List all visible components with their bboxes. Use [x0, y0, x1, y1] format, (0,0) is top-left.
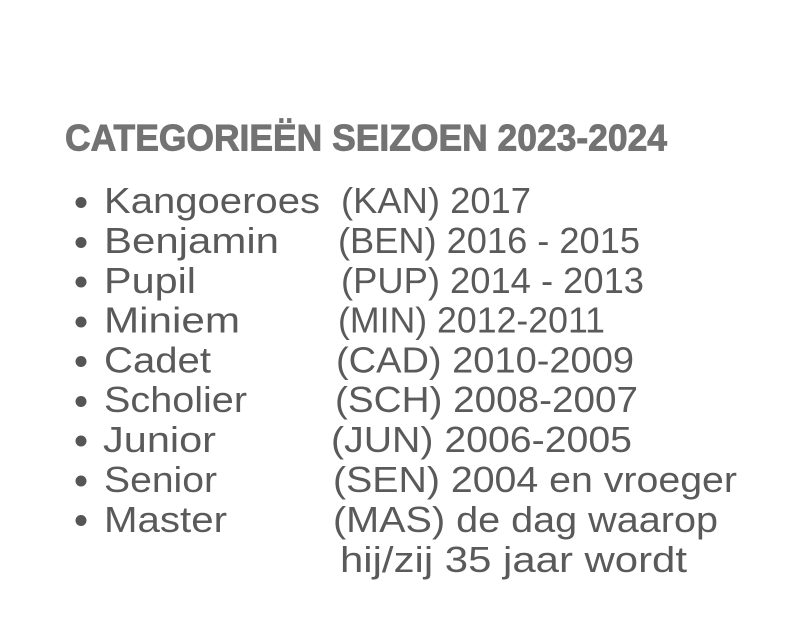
row: Master: hij/zij 35 jaar wordt — [340, 539, 687, 580]
row: Senior: Senior — [104, 459, 217, 500]
row: Miniem — [76, 300, 605, 340]
row: Junior — [76, 419, 632, 460]
row: Pupil: (PUP) 2014 - 2013 — [341, 260, 644, 301]
row: Pupil — [76, 260, 644, 301]
row: Miniem: Miniem — [104, 300, 240, 340]
row: Benjamin — [76, 220, 640, 261]
row: Senior: (SEN) 2004 en vroeger — [333, 459, 737, 500]
row: Senior — [76, 459, 737, 500]
row: Pupil: Pupil — [104, 260, 196, 301]
row: Kangoeroes — [76, 180, 531, 221]
row: Cadet: (CAD) 2010-2009 — [336, 340, 634, 380]
row: Scholier: (SCH) 2008-2007 — [335, 379, 638, 420]
title: CATEGORIEËN SEIZOEN 2023-2024 — [65, 118, 667, 158]
row: Master: (MAS) de dag waarop — [333, 499, 718, 540]
row: Cadet: Cadet — [104, 340, 211, 380]
row: Benjamin: (BEN) 2016 - 2015 — [338, 220, 640, 261]
row: Scholier: Scholier — [104, 379, 247, 420]
row: Master — [76, 499, 718, 580]
list of categories — [76, 180, 737, 580]
row: Benjamin: Benjamin — [104, 220, 279, 261]
row: Scholier — [76, 379, 638, 420]
row: Cadet — [76, 340, 634, 380]
row: Kangoeroes: (KAN) 2017 — [341, 180, 531, 221]
row: Miniem: (MIN) 2012-2011 — [338, 300, 605, 340]
row: Kangoeroes: Kangoeroes — [104, 180, 320, 221]
row: Junior: (JUN) 2006-2005 — [331, 419, 632, 460]
row: Master: Master — [104, 499, 227, 540]
row: Junior: Junior — [103, 419, 216, 460]
